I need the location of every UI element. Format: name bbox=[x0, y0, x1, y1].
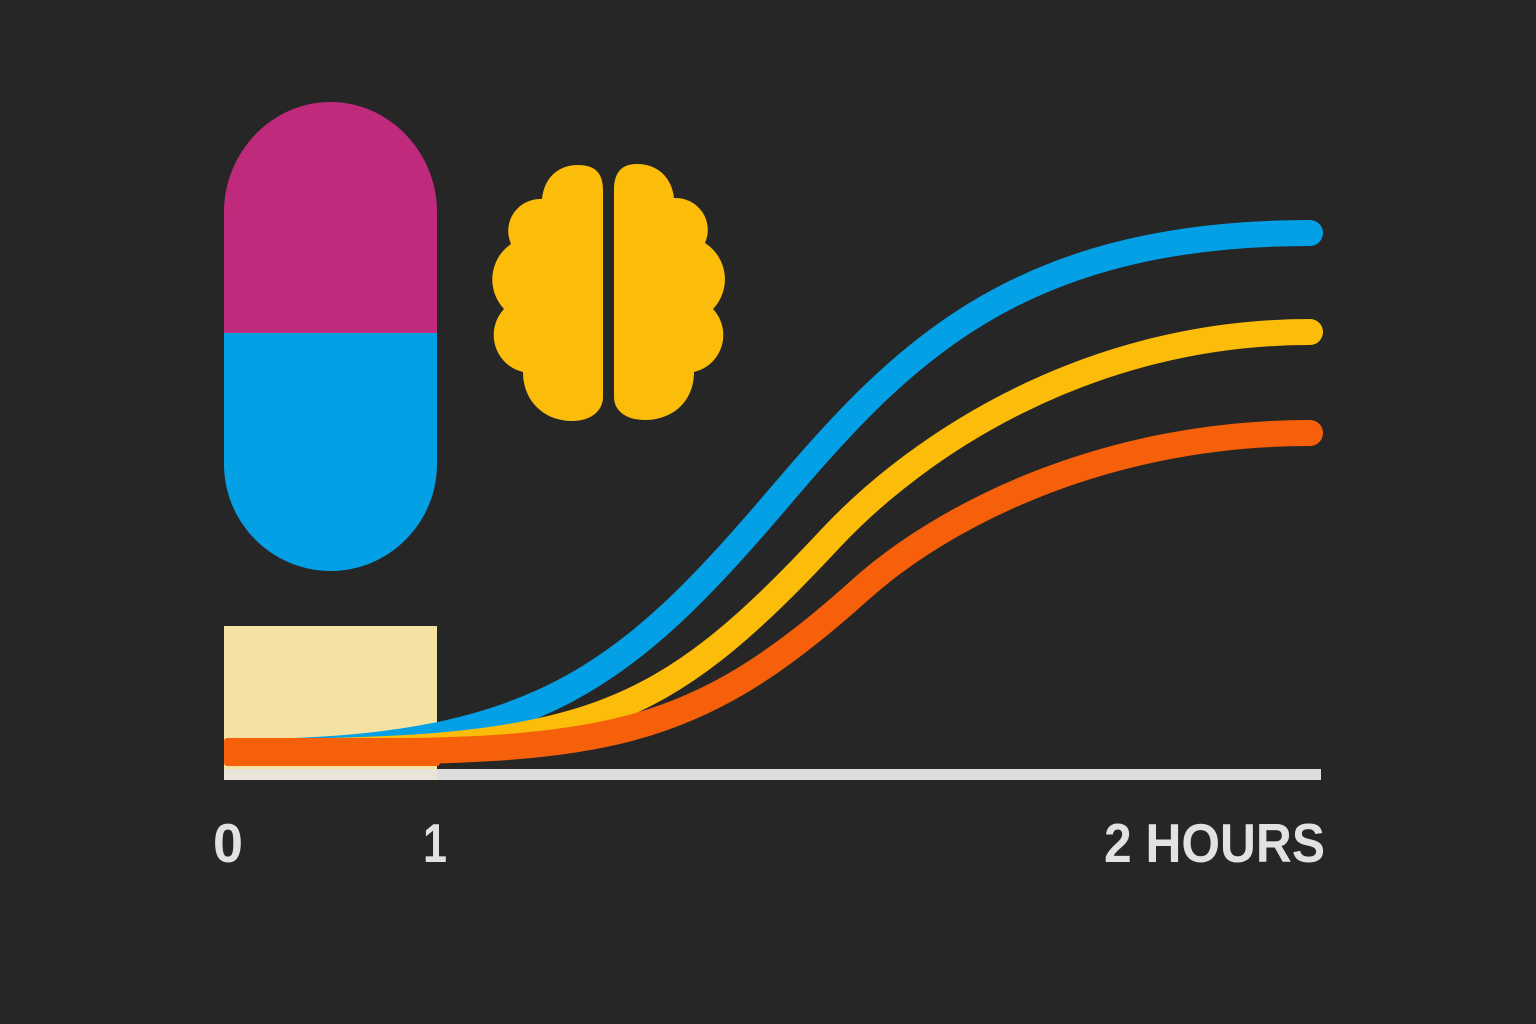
left hemisphere bbox=[492, 165, 603, 421]
highlighted first-hour block bbox=[224, 626, 437, 780]
axis label: 0: 0 bbox=[213, 812, 243, 874]
axis label: 1: 1 bbox=[423, 812, 447, 874]
axis label: 2 hours: 2 HOURS bbox=[1104, 812, 1325, 874]
capsule top half bbox=[224, 102, 437, 333]
blue curve bbox=[237, 233, 1310, 752]
icon: brain bbox=[492, 164, 725, 421]
yellow curve bbox=[237, 332, 1310, 752]
icon: capsule bbox=[224, 102, 437, 571]
orange baseline bbox=[224, 738, 440, 766]
time axis bbox=[224, 769, 1321, 780]
right hemisphere bbox=[614, 164, 725, 420]
orange curve bbox=[300, 433, 1310, 752]
capsule bottom half bbox=[224, 333, 437, 571]
curves chart bbox=[237, 233, 1310, 752]
